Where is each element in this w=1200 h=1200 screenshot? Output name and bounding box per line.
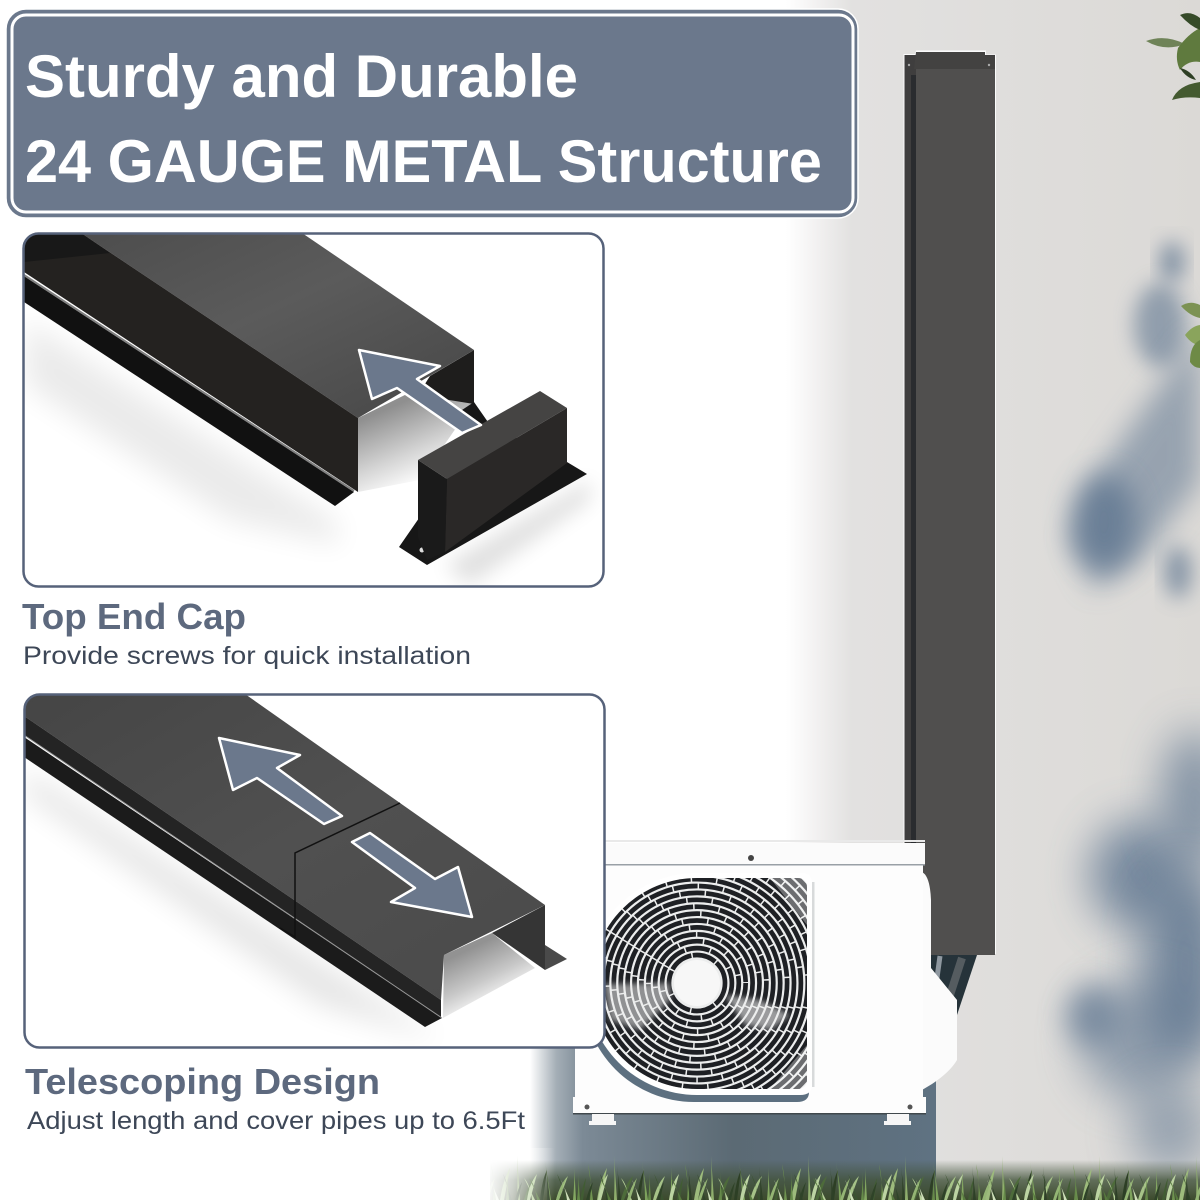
end cap left [418, 460, 447, 560]
top cap of pipe cover [914, 52, 995, 69]
end cap top [418, 391, 567, 479]
opening interior shade [443, 933, 535, 1018]
heading: top end cap: Top End Cap [22, 596, 246, 637]
description: top end cap: Provide screws for quick installation [23, 642, 471, 670]
base plate [573, 1097, 926, 1114]
duct flange [24, 276, 354, 506]
panel: telescoping design [24, 694, 604, 1048]
shadow under air conditioner [530, 1030, 936, 1200]
leaf shadows on wall [1066, 242, 1200, 1175]
grille rim [586, 873, 812, 1095]
grass [485, 1148, 1200, 1200]
duct top face [81, 233, 474, 418]
end cap shadow [445, 480, 590, 585]
title line 1: Sturdy and Durable [25, 43, 578, 110]
duct soft shadow [26, 320, 340, 545]
inner side wall [492, 905, 545, 970]
arrow: extend left [219, 738, 342, 824]
leaves: right middle [1181, 303, 1200, 368]
end cap front [445, 408, 567, 552]
pipe cover on wall [904, 50, 996, 955]
unit body [575, 865, 923, 1105]
duct opening interior shade [358, 392, 474, 492]
pipes under cover [930, 955, 977, 1015]
side band [24, 716, 441, 1018]
title banner [6, 9, 858, 218]
fan hub [674, 960, 720, 1006]
duct side face [24, 233, 358, 492]
arrow: extend right [352, 833, 472, 917]
description: telescoping design: Adjust length and cover pipes up to 6.5Ft [27, 1107, 525, 1135]
mounting feet [589, 1114, 911, 1125]
valve cover [922, 872, 957, 1090]
leaves: top right [1146, 13, 1200, 100]
duct soft shadow [28, 778, 404, 1028]
duct inner wall [425, 350, 474, 404]
fan grille [605, 878, 807, 1089]
seam of telescoping sections [280, 803, 400, 937]
grille recess shadow [583, 880, 809, 1102]
flange [545, 945, 567, 970]
panel: top end cap [24, 233, 604, 586]
end cap flange [399, 402, 587, 565]
air conditioner outdoor unit [573, 840, 957, 1125]
bottom flange [24, 737, 442, 1027]
title line 2: 24 GAUGE METAL Structure [25, 128, 822, 195]
top face [24, 694, 545, 1000]
top plate [600, 840, 925, 866]
heading: telescoping design: Telescoping Design [25, 1061, 380, 1102]
arrow: insert cap [359, 350, 481, 433]
